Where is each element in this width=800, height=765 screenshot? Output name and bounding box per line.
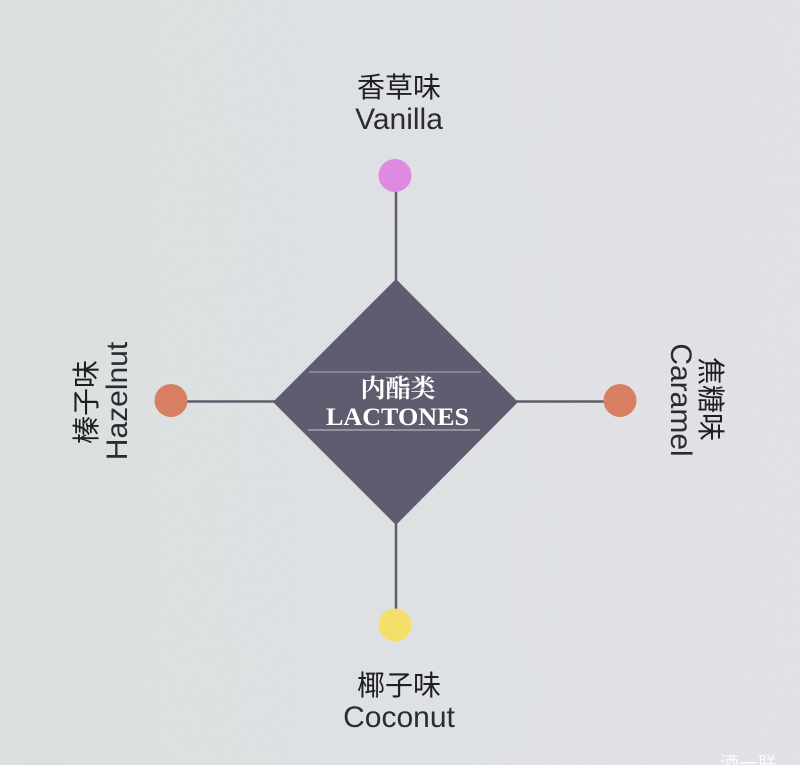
dot: hazelnut [154,384,188,417]
label: hazelnut [71,341,134,460]
lower rule [308,429,480,431]
connector: top [395,190,397,282]
connector: left [185,400,276,403]
hazelnut chinese: 榛子味 [71,360,102,444]
diamond title english: LACTONES [326,404,469,431]
diamond title chinese: 内酯类 [360,375,436,403]
vanilla english: Vanilla [355,103,443,136]
dot: vanilla [378,159,412,192]
connector: bottom [395,522,397,612]
vanilla chinese: 香草味 [357,72,441,103]
label: vanilla [355,72,443,136]
label: caramel [664,343,726,457]
caramel chinese: 焦糖味 [695,357,726,441]
caramel english: Caramel [664,343,697,457]
label: coconut [343,670,456,734]
coconut chinese: 椰子味 [357,670,441,701]
connector: right [515,400,606,403]
central diamond: lactones [273,279,518,525]
dot: caramel [604,384,636,417]
hazelnut english: Hazelnut [101,341,134,460]
coconut english: Coconut [343,701,456,734]
diamond shape [273,279,518,525]
dot: coconut [378,608,412,642]
upper rule [309,371,481,373]
